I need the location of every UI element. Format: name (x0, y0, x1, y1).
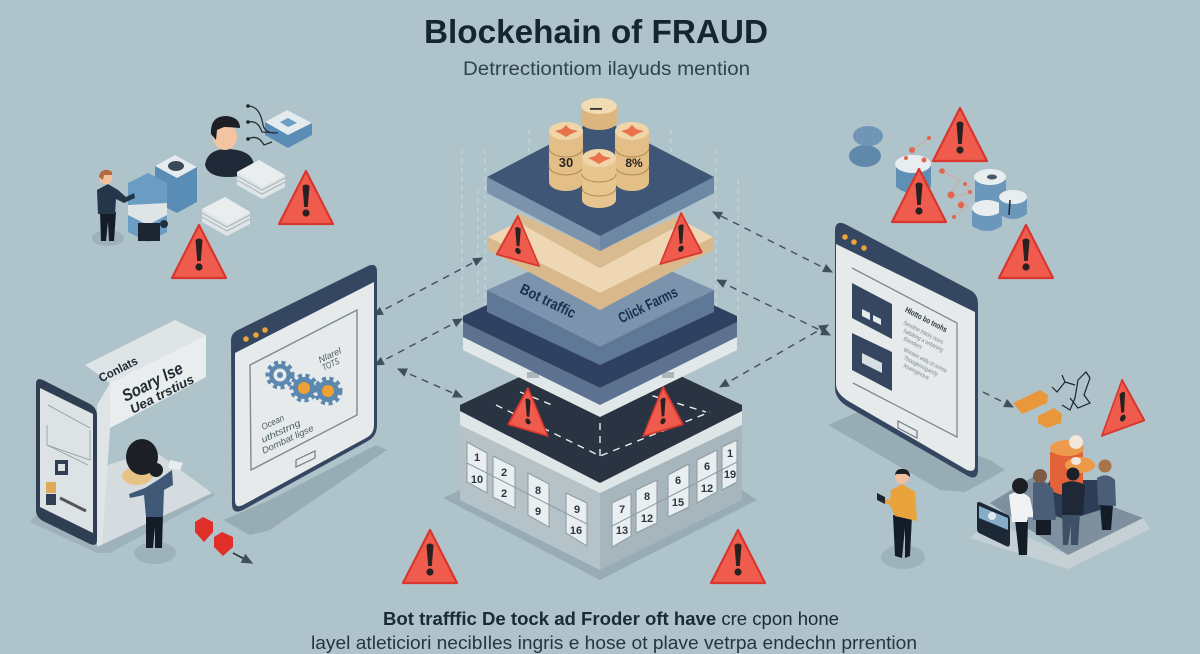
orange cylinder (1050, 435, 1095, 495)
person: right (1097, 460, 1116, 530)
warning: bottom left (403, 530, 457, 583)
gears (268, 362, 340, 404)
avatar bust (205, 116, 254, 177)
orange blocks and black network (1013, 372, 1090, 428)
panel numbers: 19 (724, 469, 736, 481)
browser button (898, 421, 917, 438)
monitor (977, 502, 1010, 547)
panel numbers: 2 (501, 467, 507, 479)
arrow: left browser to navy layer (375, 319, 462, 365)
base building (443, 338, 757, 580)
warning: lower right (1101, 372, 1144, 436)
sign box (85, 320, 206, 428)
panel numbers: 16 (570, 525, 582, 537)
browser body text: Sensitive fratory nours (902, 320, 944, 346)
footer line 2: layel atleticiori necibIles ingris e hose ot plave vetrpa endechn prrention (311, 633, 917, 653)
panel numbers: 12 (641, 513, 653, 525)
person: dark suit centre (1062, 468, 1085, 545)
sign box: Soary lse (119, 359, 186, 406)
browser body text: Whirstem entity ctt comma (902, 347, 948, 375)
browser body text: Thoogemogandy (902, 355, 939, 378)
browser text (260, 345, 344, 456)
wall number panels (467, 440, 737, 547)
right coin stack: 8% (625, 156, 643, 170)
arrow: right browser to blue layer (717, 280, 830, 335)
browser text: TOTS (320, 356, 341, 373)
orange person with phone (877, 469, 925, 569)
browser body text: fevenginous (902, 363, 930, 381)
panel numbers: 1 (474, 452, 480, 464)
phone (36, 379, 97, 545)
sign box: Conlats (96, 354, 140, 385)
title: Blockehain of FRAUD (424, 13, 768, 50)
person: blue jacket left (1033, 469, 1056, 535)
panel numbers: 8 (644, 491, 650, 503)
panel numbers: 7 (619, 504, 625, 516)
layer: bot traffic and click farms (487, 240, 714, 365)
warning: upper right c (999, 225, 1053, 278)
panel numbers: 2 (501, 488, 507, 500)
paper stacks (202, 160, 285, 236)
coin stacks (549, 98, 649, 208)
left browser window (223, 265, 387, 535)
panel numbers: 13 (616, 525, 628, 537)
network links (913, 138, 970, 216)
panel numbers: 12 (701, 483, 713, 495)
blue server machine (128, 155, 197, 242)
back coin stack (581, 98, 617, 160)
panel numbers: 6 (675, 475, 681, 487)
warning: upper left a (279, 171, 333, 224)
warning: stack right (660, 207, 702, 264)
browser body text (902, 320, 948, 381)
left cylinder (895, 155, 931, 194)
warning: upper right b (892, 169, 946, 222)
warning: stack left (497, 210, 539, 266)
subtitle: Detrrectiontiom ilayuds mention (463, 59, 750, 80)
panel numbers: 9 (574, 504, 580, 516)
left coin stack: 30 (559, 155, 573, 170)
network nodes (904, 136, 972, 219)
sign box: Uea trstius (127, 371, 197, 417)
arrow: right browser to blocks (983, 392, 1013, 407)
panel numbers (471, 448, 736, 537)
team around orange cylinder on platform (970, 435, 1150, 569)
panel numbers: 6 (704, 461, 710, 473)
browser body text: halsiking a ontinning (902, 328, 944, 354)
right cylinders (972, 169, 1027, 231)
layer: tan (488, 213, 713, 310)
browser text: Nlarel (317, 345, 344, 365)
person left (92, 170, 135, 246)
arrow: right browser to base (720, 325, 828, 387)
dotted guide lines around stack (462, 130, 738, 340)
top plate (487, 118, 714, 251)
front coin stack (582, 149, 616, 208)
arrow: left browser to tan layer (374, 258, 482, 315)
person: white shirt (1009, 478, 1041, 555)
footer line 1: Bot trafffic De tock ad Froder oft have cre cpon hone (383, 609, 839, 629)
media panels (852, 283, 892, 391)
central blockchain stack (443, 98, 757, 580)
lower plate (463, 285, 737, 417)
footer text (311, 609, 917, 653)
red cubes and small arrow (195, 517, 252, 563)
right browser window (828, 223, 1005, 492)
top left scene (92, 104, 312, 246)
warning: base left (508, 382, 548, 436)
device with cables (246, 104, 312, 148)
top right scene: databases (849, 126, 1027, 231)
label: bot traffic: Bot traffic (517, 281, 578, 322)
warning: upper left b (172, 225, 226, 278)
label: click farms: Click Farms (616, 284, 681, 327)
warning: upper right a (933, 108, 987, 161)
browser body text: thenders (902, 336, 923, 351)
arrow: right browser to tan layer (713, 212, 832, 272)
browser text: Dombat ligse (260, 423, 315, 456)
warning: base right (643, 381, 683, 436)
dashed connector arrows (374, 212, 1013, 407)
browser text: Ocean (260, 413, 286, 432)
panel numbers: 15 (672, 497, 684, 509)
panel numbers: 8 (535, 485, 541, 497)
left sign and phone kiosk (30, 320, 252, 564)
panel numbers: 1 (727, 448, 733, 460)
browser text: uthtstrng (260, 418, 302, 445)
panel numbers: 9 (535, 506, 541, 518)
blue gears (849, 126, 883, 167)
warning: bottom right (711, 530, 765, 583)
browser button (296, 451, 315, 467)
browser heading: Hlotto bo tnohs (904, 305, 949, 334)
arrow: left to base (398, 369, 462, 397)
panel numbers: 10 (471, 474, 483, 486)
person with screen (122, 439, 183, 564)
warning triangles (172, 108, 1144, 583)
